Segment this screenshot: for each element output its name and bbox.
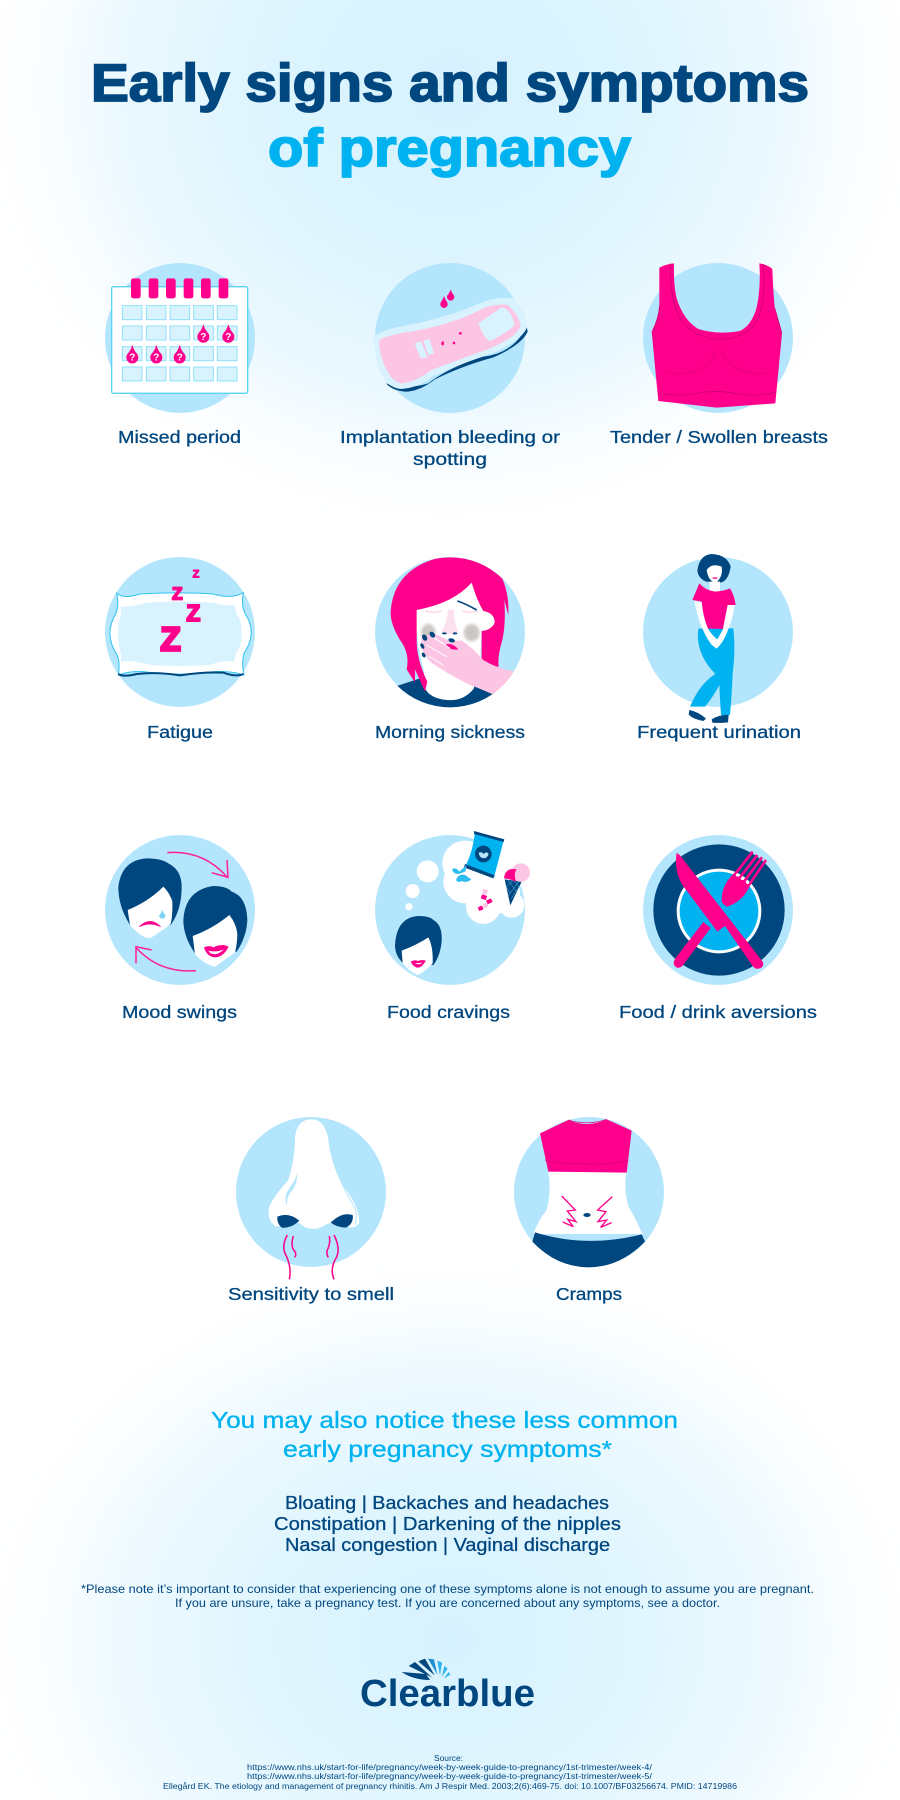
panel: cramps <box>514 1117 664 1304</box>
label: Fatigue <box>147 722 213 742</box>
sources: https://www.nhs.uk/start-for-life/pregnancy/week-by-week-guide-to-pregnancy/1st-trimester/week-4/ <box>247 1762 653 1772</box>
icon: calendar: ? <box>129 353 135 364</box>
icon: thought bubble with foods <box>395 831 530 975</box>
note: If you are unsure, take a pregnancy test. If you are concerned about any symptoms, see a doctor. <box>175 1596 720 1610</box>
heading: less common symptoms: You may also notice these less common <box>211 1407 678 1433</box>
icon: knife <box>676 853 763 969</box>
label: Implantation bleeding or <box>340 427 560 447</box>
label: Missed period <box>118 427 241 447</box>
list: less common symptoms <box>274 1493 621 1555</box>
arrow: clockwise top <box>167 852 228 877</box>
icon: plate, knife and fork <box>653 844 785 976</box>
sources: Ellegård EK. The etiology and management of pregnancy rhinitis. Am J Respir Med. 2003;2(6):469-75. doi: 10.1007/BF03256674. PMID: 14719986 <box>163 1781 737 1791</box>
icon: pillow: Z <box>160 621 181 658</box>
panel: frequent urination <box>637 554 801 742</box>
heading: less common symptoms: early pregnancy symptoms* <box>283 1436 612 1462</box>
icon: nose <box>269 1119 359 1279</box>
label <box>340 427 560 469</box>
title: of pregnancy <box>268 119 632 178</box>
label: Tender / Swollen breasts <box>610 427 828 447</box>
icon: two faces <box>118 852 247 971</box>
panel: missed period <box>105 263 255 447</box>
heading: less common symptoms <box>211 1407 678 1462</box>
label: Cramps <box>556 1284 622 1304</box>
icon: sunburst <box>402 1659 450 1680</box>
icon: calendar: ? <box>200 332 206 343</box>
panel: implantation bleeding <box>340 263 560 469</box>
label: Morning sickness <box>375 722 525 742</box>
icon: calendar <box>112 278 248 393</box>
sources: Source: <box>434 1753 463 1763</box>
note <box>81 1582 814 1610</box>
panel: fatigue <box>105 557 255 742</box>
label: spotting <box>413 449 487 469</box>
panel: morning sickness <box>375 557 525 742</box>
icon: pillow: Z <box>172 583 183 603</box>
icon: pillow <box>110 569 251 676</box>
label: Mood swings <box>122 1002 237 1022</box>
icon: panty liner <box>374 289 528 392</box>
arrow: clockwise bottom <box>136 947 196 971</box>
panel: tender breasts <box>610 263 828 447</box>
icon: calendar: ? <box>177 353 183 364</box>
label: Food cravings <box>387 1002 510 1022</box>
list: less common symptoms: Nasal congestion | Vaginal discharge <box>285 1535 610 1555</box>
title: Early signs and symptoms <box>91 54 809 113</box>
icon: torso <box>532 1119 645 1267</box>
panel: food aversions <box>619 835 817 1022</box>
label: Food / drink aversions <box>619 1002 817 1022</box>
label: Sensitivity to smell <box>228 1284 394 1304</box>
list: less common symptoms: Bloating | Backaches and headaches <box>285 1493 609 1513</box>
list: less common symptoms: Constipation | Darkening of the nipples <box>274 1514 621 1534</box>
icon: pillow: Z <box>186 600 200 626</box>
sources <box>163 1753 737 1791</box>
sources: https://www.nhs.uk/start-for-life/pregnancy/week-by-week-guide-to-pregnancy/1st-trimester/week-5/ <box>247 1771 653 1781</box>
panel: mood swings <box>105 835 255 1022</box>
icon: calendar: ? <box>153 353 159 364</box>
icon: crop top <box>652 263 782 408</box>
icon: woman covering mouth <box>391 557 515 710</box>
panel: sensitivity to smell <box>228 1117 394 1304</box>
icon: standing woman <box>689 554 736 723</box>
icon: pillow: Z <box>193 569 200 581</box>
icon: calendar: ? <box>225 332 231 343</box>
icon: smell waves <box>284 1235 338 1279</box>
panel: food cravings <box>375 831 530 1022</box>
logo: Clearblue: Clearblue <box>360 1673 535 1715</box>
icon: fork <box>674 852 766 968</box>
icon: pain bolts <box>562 1196 612 1227</box>
title <box>91 54 809 178</box>
label: Frequent urination <box>637 722 801 742</box>
note: *Please note it’s important to consider that experiencing one of these symptoms alone is not enough to assume you are pregnant. <box>81 1582 814 1596</box>
